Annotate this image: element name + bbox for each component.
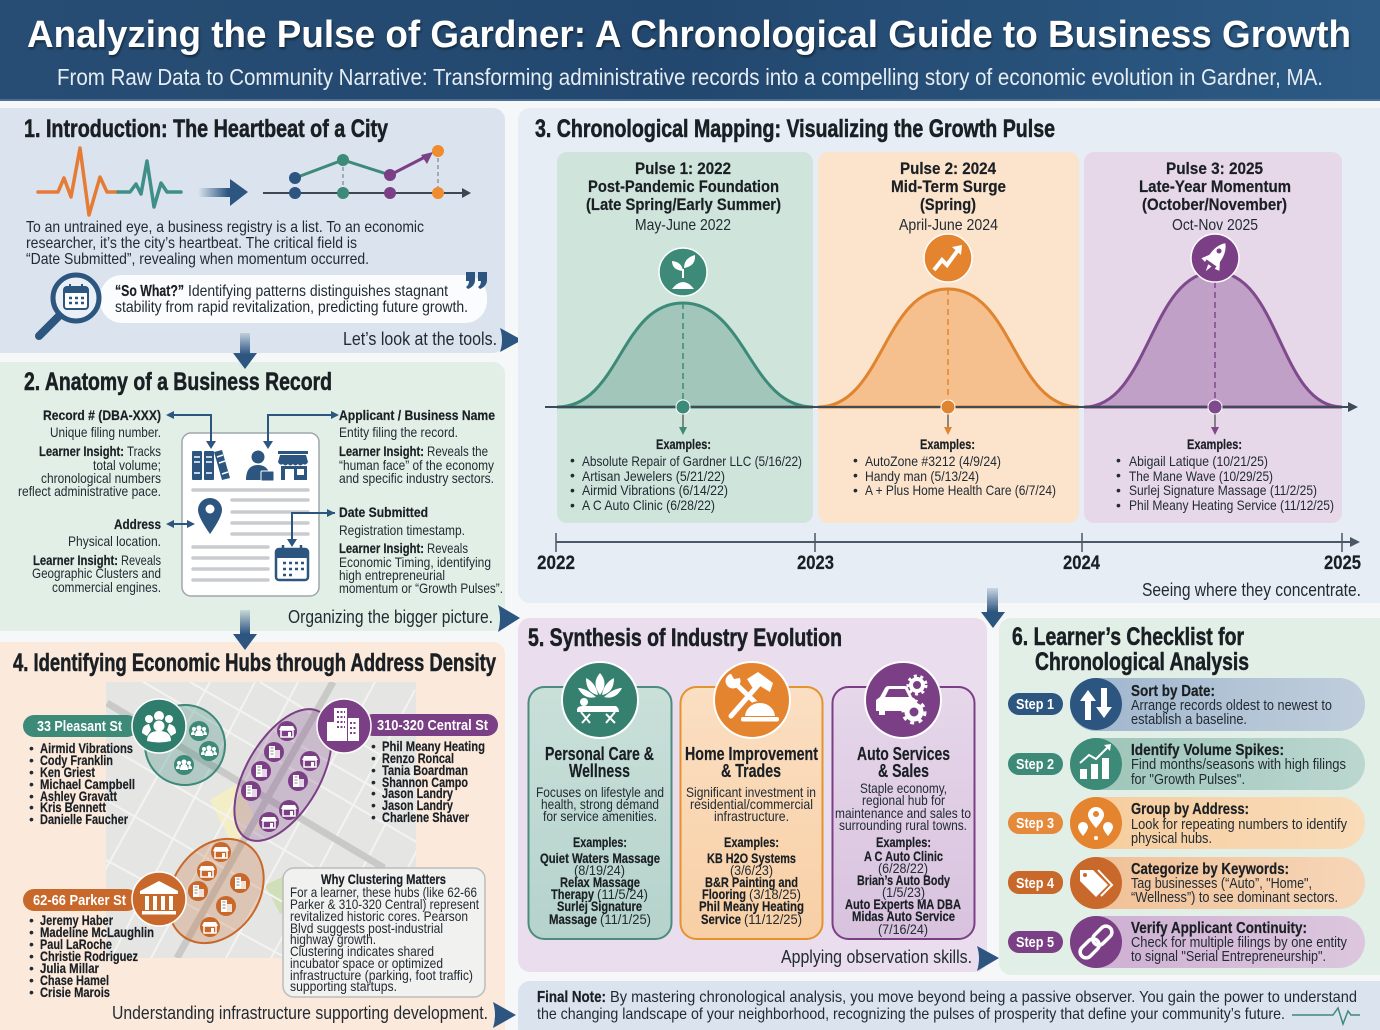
list: •: [371, 738, 376, 754]
header banner: [0, 0, 1380, 101]
examples 3: Surlej Signature Massage (11/2/25): [1129, 482, 1317, 498]
card: personal care: for service amenities.: [543, 808, 657, 824]
panel: 5 synthesis: [518, 618, 987, 972]
icon: car and gears: [865, 662, 941, 738]
examples 1: •: [570, 467, 575, 483]
list: [371, 738, 485, 825]
text: record number: Record # (DBA-XXX): [43, 407, 161, 423]
text: applicant: “human face” of the economy: [339, 457, 494, 473]
text: record number: total volume;: [93, 457, 161, 473]
callout: so what: stability from rapid revitalization, predicting future growth.: [115, 299, 468, 316]
icon: mini pulse: [1292, 1008, 1360, 1024]
callout: why clustering matters: For a learner, these hubs (like 62-66: [290, 884, 477, 900]
card: auto services: surrounding rural towns.: [839, 817, 967, 833]
examples 3: Examples:: [1187, 436, 1242, 452]
list: Phil Meany Heating: [382, 738, 485, 754]
bell curve 2: [818, 289, 1079, 407]
bell curve 3: [1084, 272, 1342, 407]
step 5: [1008, 916, 1365, 968]
callout: why clustering matters: Clustering indicates shared: [290, 943, 434, 959]
callout: why clustering matters: Parker & 310-320 Central) represent: [290, 896, 479, 912]
arrow: right observation: [977, 946, 999, 971]
list: Julia Millar: [40, 960, 99, 976]
examples 3: The Mane Wave (10/29/25): [1129, 468, 1273, 484]
card: auto services: [832, 662, 974, 939]
step 2: Identify Volume Spikes:: [1131, 742, 1284, 759]
card: auto services: regional hub for: [862, 792, 945, 808]
examples 1: Artisan Jewelers (5/21/22): [582, 468, 725, 484]
examples 1: Airmid Vibrations (6/14/22): [582, 482, 728, 498]
list: Charlene Shaver: [382, 809, 469, 825]
list: Christie Rodriguez: [40, 948, 138, 964]
card: home improvement: Examples:: [724, 834, 779, 850]
list: •: [371, 785, 376, 801]
arrow: right tools: [500, 328, 522, 352]
examples 3: •: [1116, 482, 1121, 498]
column: pulse 1: Pulse 1: 2022: [635, 159, 731, 178]
callout: why clustering matters: incubator space or optimized: [290, 955, 443, 971]
text: date submitted: high entrepreneurial: [339, 567, 445, 583]
column: pulse 3: Pulse 3: 2025: [1166, 159, 1263, 178]
year timeline: 2024: [1063, 553, 1100, 574]
list: •: [29, 740, 34, 756]
text: record number: [18, 407, 161, 499]
text: applicant: Applicant / Business Name: [339, 407, 495, 423]
card: personal care: Surlej Signature: [557, 898, 642, 914]
icon: chain link: [1070, 916, 1122, 968]
transition text: Let’s look at the tools.: [343, 329, 497, 349]
card: auto services: Midas Auto Service: [852, 908, 955, 924]
text: address: Geographic Clusters and: [32, 565, 161, 581]
list: •: [371, 750, 376, 766]
text: date submitted: momentum or “Growth Pulses”.: [339, 580, 503, 596]
column: pulse 2: [818, 152, 1079, 523]
panel: final note: [518, 981, 1380, 1030]
icon: heartbeat pulse: [38, 148, 181, 215]
step 4: Step 4: [1016, 875, 1055, 892]
label pill: 33 Pleasant St: [37, 718, 122, 735]
examples 1: •: [570, 482, 575, 498]
column: pulse 3: (October/November): [1142, 195, 1287, 214]
card: home improvement: (3/18/25): [749, 886, 801, 902]
icon: storefront: [278, 451, 308, 480]
card: home improvement: B&R Painting and: [705, 874, 798, 890]
year timeline: 2023: [797, 553, 834, 574]
card: home improvement: infrastructure.: [714, 808, 789, 824]
card: personal care: Focuses on lifestyle and: [536, 784, 664, 800]
card: auto services: (1/5/23): [882, 884, 925, 900]
panel: final note: Final Note:: [537, 989, 606, 1006]
text: date submitted: Economic Timing, identifying: [339, 554, 491, 570]
list: •: [29, 764, 34, 780]
text: address: Learner Insight:: [33, 552, 118, 568]
text: record number: chronological numbers: [41, 470, 161, 486]
icon: applicant person: [246, 450, 274, 481]
icon: sprout: [659, 248, 707, 296]
list: •: [29, 984, 34, 1000]
text: address: Reveals: [121, 552, 161, 568]
list: Jeremy Haber: [40, 912, 113, 928]
list: •: [29, 776, 34, 792]
list: Michael Campbell: [40, 776, 135, 792]
label pill: [23, 889, 138, 911]
text: record number: Tracks: [127, 443, 161, 459]
examples 2: •: [853, 452, 858, 468]
list: •: [29, 972, 34, 988]
hub: 62-66 Parker St: [23, 820, 283, 1000]
list: •: [371, 774, 376, 790]
list: •: [371, 762, 376, 778]
arrow: right infrastructure: [493, 1002, 516, 1028]
examples 1: [570, 436, 802, 513]
step 2: for "Growth Pulses".: [1131, 772, 1245, 788]
icon: binders: [192, 450, 230, 480]
icon: magnifier with calendar: [39, 275, 99, 336]
card: home improvement: & Trades: [721, 761, 781, 781]
icon: tools and hard hat: [714, 662, 790, 738]
card: personal care: (8/19/24): [574, 862, 625, 878]
list: Airmid Vibrations: [40, 740, 133, 756]
icon: bar chart: [1070, 738, 1122, 790]
chart: mini timeline: [263, 145, 471, 199]
examples 3: •: [1116, 452, 1121, 468]
list: Ken Griest: [40, 764, 95, 780]
list: Renzo Roncal: [382, 750, 454, 766]
heading 2: 2. Anatomy of a Business Record: [24, 368, 332, 396]
intro paragraph: To an untrained eye, a business registry is a list. To an economic: [26, 219, 424, 236]
examples 2: AutoZone #3212 (4/9/24): [865, 453, 1001, 469]
examples 2: Handy man (5/13/24): [865, 468, 979, 484]
arrow: right picture: [498, 605, 520, 632]
arrow: down section 2 to 4: [233, 610, 257, 650]
callout: why clustering matters: Why Clustering Matters: [321, 871, 446, 887]
step 1: [1008, 678, 1365, 731]
column: pulse 2: Pulse 2: 2024: [900, 159, 996, 178]
list: Ashley Gravatt: [40, 788, 117, 804]
list: •: [29, 811, 34, 827]
list: [29, 912, 154, 1000]
heading 1: 1. Introduction: The Heartbeat of a City: [24, 115, 388, 143]
examples 3: •: [1116, 467, 1121, 483]
card: personal care: Examples:: [573, 834, 627, 850]
column: pulse 1: (Late Spring/Early Summer): [586, 195, 781, 214]
icon: location pin: [198, 498, 222, 534]
text: address: Address: [114, 516, 161, 532]
arrows: record connectors: [166, 411, 339, 547]
label pill: 62-66 Parker St: [33, 892, 126, 909]
list: •: [371, 809, 376, 825]
card: home improvement: residential/commercial: [690, 796, 813, 812]
list: Jason Landry: [382, 785, 453, 801]
transition text: Applying observation skills.: [781, 947, 972, 967]
card: home improvement: Service: [701, 911, 741, 927]
examples 2: •: [853, 482, 858, 498]
list: [29, 740, 135, 827]
list: •: [29, 936, 34, 952]
step 5: to signal "Serial Entrepreneurship".: [1131, 949, 1326, 965]
column: pulse 3: [1084, 152, 1342, 523]
hub: 310-320 Central St: [214, 693, 498, 857]
step 3: Group by Address:: [1131, 801, 1249, 818]
icon: calendar: [276, 545, 308, 580]
card: personal care: Wellness: [569, 761, 630, 781]
column: pulse 1: Post-Pandemic Foundation: [588, 177, 779, 196]
examples 2: [853, 436, 1056, 498]
text: address: commercial engines.: [52, 579, 161, 595]
card: personal care: health, strong demand: [541, 796, 659, 812]
callout: so what: “So What?”: [115, 283, 184, 300]
text: date submitted: Date Submitted: [339, 504, 428, 520]
icon: pins: [1070, 797, 1122, 849]
list: Madeline McLaughlin: [40, 924, 154, 940]
card: auto services: A C Auto Clinic: [864, 848, 943, 864]
icon: quote marks: [466, 272, 487, 289]
examples 3: Abigail Latique (10/21/25): [1129, 453, 1268, 469]
heading 4: 4. Identifying Economic Hubs through Address Density: [13, 649, 496, 677]
card: home improvement: KB H2O Systems: [707, 850, 796, 866]
text: date submitted: [339, 504, 503, 596]
card: personal care: (11/1/25): [600, 911, 651, 927]
step 3: Look for repeating numbers to identify: [1131, 817, 1348, 833]
step 1: Step 1: [1016, 696, 1054, 713]
column: pulse 2: April-June 2024: [899, 217, 998, 234]
pulse axis: [545, 272, 1358, 435]
examples 3: Phil Meany Heating Service (11/12/25): [1129, 497, 1334, 513]
icon: lotus and table: [562, 662, 638, 738]
column: pulse 3: Late-Year Momentum: [1139, 177, 1291, 196]
text: date submitted: Learner Insight:: [339, 540, 424, 556]
card: auto services: Auto Experts MA DBA: [845, 896, 961, 912]
record document card: [182, 433, 319, 596]
panel: 6 checklist: [999, 618, 1380, 975]
step 2: Step 2: [1016, 756, 1054, 773]
callout: so what: [100, 275, 487, 323]
column: pulse 2: (Spring): [920, 195, 976, 214]
column: pulse 1: May-June 2022: [635, 217, 731, 234]
callout: why clustering matters: infrastructure (parking, foot traffic): [290, 967, 473, 983]
examples 1: A C Auto Clinic (6/28/22): [582, 497, 715, 513]
examples 1: Examples:: [656, 436, 711, 452]
card: home improvement: (11/12/25): [744, 911, 802, 927]
card: auto services: & Sales: [878, 761, 929, 781]
list: •: [29, 948, 34, 964]
list: •: [29, 752, 34, 768]
year timeline: 2025: [1324, 553, 1361, 574]
year timeline: 2022: [537, 553, 575, 574]
intro paragraph: researcher, it’s the city’s heartbeat. The critical field is: [26, 235, 357, 252]
list: Jason Landry: [382, 797, 453, 813]
column: pulse 3: Oct-Nov 2025: [1172, 217, 1258, 234]
heading 3: 3. Chronological Mapping: Visualizing the Growth Pulse: [535, 115, 1055, 143]
card: auto services: Staple economy,: [860, 780, 947, 796]
list: Chase Hamel: [40, 972, 109, 988]
text: address: [32, 516, 161, 595]
list: •: [29, 799, 34, 815]
list: •: [371, 797, 376, 813]
callout: why clustering matters: highway growth.: [290, 931, 376, 947]
transition text: Organizing the bigger picture.: [288, 607, 493, 627]
icon: buildings: [317, 699, 371, 753]
examples 3: [1116, 436, 1334, 513]
heading 6: [1012, 623, 1249, 676]
step 4: Tag businesses (“Auto”, "Home",: [1131, 876, 1312, 892]
card: personal care: Personal Care &: [545, 744, 654, 764]
card: auto services: (7/16/24): [878, 921, 928, 937]
callout: why clustering matters: Blvd suggests post-industrial: [290, 920, 443, 936]
column: pulse 1: [557, 152, 813, 523]
step 2: Find months/seasons with high filings: [1131, 757, 1346, 773]
card: auto services: Auto Services: [857, 744, 950, 764]
step 5: Verify Applicant Continuity:: [1131, 920, 1307, 937]
text: applicant: Reveals the: [427, 443, 488, 459]
list: Paul LaRoche: [40, 936, 112, 952]
card: home improvement: Flooring: [702, 886, 746, 902]
list: •: [29, 924, 34, 940]
heading 6: Chronological Analysis: [1035, 648, 1249, 676]
card: personal care: Quiet Waters Massage: [540, 850, 660, 866]
card: personal care: Massage: [549, 911, 597, 927]
step 3: Step 3: [1016, 815, 1054, 832]
card: auto services: Examples:: [876, 834, 931, 850]
arrow: down section 3 to 6: [981, 588, 1005, 628]
card: personal care: Therapy: [551, 886, 594, 902]
callout: so what: Identifying patterns distinguishes stagnant: [188, 283, 448, 300]
arrow: down section 1 to 2: [233, 333, 257, 369]
list: Crisie Marois: [40, 984, 110, 1000]
card: personal care: Relax Massage: [560, 874, 640, 890]
text: record number: Unique filing number.: [50, 424, 161, 440]
list: Shannon Campo: [382, 774, 468, 790]
step 5: Step 5: [1016, 934, 1054, 951]
examples 2: Examples:: [920, 436, 975, 452]
intro paragraph: “Date Submitted”, revealing when momentum occurred.: [26, 251, 369, 268]
icon: community: [132, 699, 186, 753]
callout: why clustering matters: revitalized historic cores. Pearson: [290, 908, 468, 924]
title: Analyzing the Pulse of Gardner: A Chronological Guide to Business Growth: [27, 14, 1351, 56]
icon: tags: [1070, 857, 1122, 909]
list: •: [29, 788, 34, 804]
list: •: [29, 960, 34, 976]
step 2: [1008, 738, 1365, 790]
list: Kris Bennett: [40, 799, 106, 815]
step 1: establish a baseline.: [1131, 712, 1247, 728]
text: applicant: and specific industry sectors.: [339, 470, 494, 486]
intro paragraph: [26, 219, 424, 268]
text: applicant: Entity filing the record.: [339, 424, 458, 440]
label pill: [362, 714, 498, 736]
transition text: Understanding infrastructure supporting development.: [112, 1003, 488, 1023]
panel: 4 economic hubs: [0, 642, 505, 1030]
examples 1: •: [570, 497, 575, 513]
step 3: [1008, 797, 1365, 849]
icon: sort arrows: [1070, 678, 1122, 730]
step 5: Check for multiple filings by one entity: [1131, 935, 1348, 951]
panel: 3 chronological mapping: [518, 108, 1380, 603]
map: [106, 682, 416, 958]
examples 1: Absolute Repair of Gardner LLC (5/16/22): [582, 453, 802, 469]
step 1: Sort by Date:: [1131, 683, 1215, 700]
icon: growth chart: [924, 234, 972, 282]
card: auto services: (6/28/22): [878, 860, 928, 876]
card: home improvement: Home Improvement: [685, 744, 818, 764]
text: applicant: [339, 407, 495, 486]
step 4: [1008, 857, 1365, 909]
callout: why clustering matters: [283, 868, 485, 997]
text: record number: reflect administrative pace.: [18, 483, 161, 499]
year timeline: [537, 533, 1361, 574]
panel: final note: the changing landscape of your neighborhood, recognizing the pulses of prosperity that define your community’s future.: [537, 1006, 1285, 1023]
card: home improvement: Phil Meany Heating: [699, 898, 804, 914]
card: personal care: [528, 662, 672, 939]
card: home improvement: (3/6/23): [730, 862, 773, 878]
text: applicant: Learner Insight:: [339, 443, 424, 459]
card: home improvement: [680, 662, 822, 939]
list: Tania Boardman: [382, 762, 468, 778]
label pill: 310-320 Central St: [377, 717, 488, 734]
icon: civic building: [132, 872, 186, 926]
bell curve 1: [557, 303, 813, 407]
card: auto services: maintenance and sales to: [835, 805, 971, 821]
step 4: Categorize by Keywords:: [1131, 861, 1289, 878]
arrow: heartbeat to timeline: [198, 179, 248, 206]
text: date submitted: Reveals: [427, 540, 468, 556]
examples 1: •: [570, 452, 575, 468]
column: pulse 2: Mid-Term Surge: [891, 177, 1006, 196]
card: home improvement: Significant investment in: [686, 784, 816, 800]
heading 6: 6. Learner’s Checklist for: [1012, 623, 1244, 651]
list: Danielle Faucher: [40, 811, 128, 827]
card: personal care: (11/5/24): [597, 886, 648, 902]
text: address: Physical location.: [68, 533, 161, 549]
examples 2: A + Plus Home Health Care (6/7/24): [865, 482, 1056, 498]
icon: rocket: [1191, 234, 1239, 282]
text: record number: Learner Insight:: [39, 443, 124, 459]
text: date submitted: Registration timestamp.: [339, 522, 465, 538]
hub: 33 Pleasant St: [23, 699, 225, 827]
examples 2: •: [853, 467, 858, 483]
examples 3: •: [1116, 497, 1121, 513]
list: •: [29, 912, 34, 928]
callout: why clustering matters: supporting startups.: [290, 978, 397, 994]
label pill: [23, 715, 138, 737]
panel: 2 anatomy: [0, 362, 505, 631]
panel: 1 introduction: [0, 108, 505, 353]
card: auto services: Brian’s Auto Body: [857, 872, 950, 888]
step 3: physical hubs.: [1131, 831, 1212, 847]
step 1: Arrange records oldest to newest to: [1131, 698, 1332, 714]
step 4: “Wellness”) to see dominant sectors.: [1131, 890, 1338, 906]
list: Cody Franklin: [40, 752, 113, 768]
heading 5: 5. Synthesis of Industry Evolution: [528, 624, 842, 652]
